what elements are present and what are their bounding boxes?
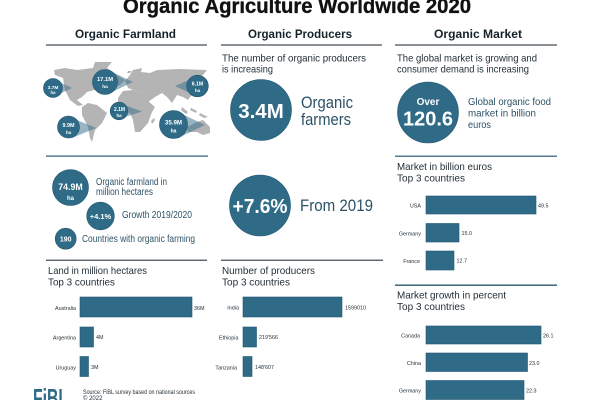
callout: 35.9M ha [160, 110, 205, 138]
stat: over 120.6: Global organic food [468, 97, 551, 108]
stat: 190 countries [55, 228, 195, 249]
panel: organic farmland [44, 29, 210, 376]
subheading: land in million hectares: Land in million hectares [48, 265, 147, 277]
callout: 35.9M ha: 35.9M [165, 120, 182, 126]
bar chart: producers: 148'607 [255, 365, 274, 371]
subheading: market in billion euros [397, 161, 492, 184]
callout: 2.1M ha: ha [116, 113, 122, 118]
bar chart: producers: Tanzania [215, 366, 237, 372]
bar chart: market: 49.5 [538, 204, 548, 210]
callout: 17.1M ha: 17.1M [97, 77, 113, 83]
bar chart: land: Australia [55, 306, 76, 312]
callout: 2.1M ha [110, 102, 142, 120]
text: producers intro [222, 52, 366, 76]
callout: 3.7M ha [44, 78, 72, 98]
bar chart: producers: Ethiopia [219, 336, 238, 342]
bar chart: land [53, 297, 205, 376]
source note [83, 390, 195, 400]
text: market intro [397, 52, 537, 76]
map: land masses [54, 62, 210, 142]
subheading: number of producers: Top 3 countries [222, 276, 290, 288]
callout: 2.1M ha: 2.1M [114, 107, 125, 113]
callout: 35.9M ha: ha [171, 128, 177, 134]
heading: organic market: Organic Market [434, 29, 522, 41]
bar chart: land: 4M [96, 335, 104, 341]
stat: 190 countries: 190 [60, 236, 72, 244]
callout: 3.7M ha: ha [51, 90, 56, 95]
bar chart: market growth: 22.3 [526, 388, 536, 394]
callout: 6.1M ha: ha [195, 88, 201, 93]
bar chart: market growth: Germany [399, 388, 421, 394]
stat: +7.6% from 2019: +7.6% [232, 196, 288, 218]
text: producers intro: is increasing [222, 64, 273, 76]
bar chart: market: Germany [399, 232, 421, 238]
subheading: market in billion euros: Market in billion euros [397, 161, 492, 173]
stat: growth 4.1%: +4.1% [90, 212, 112, 221]
bar chart: land: 36M [194, 306, 205, 312]
stat: +7.6% from 2019 [230, 175, 373, 236]
callout: 6.1M ha [175, 75, 208, 97]
bar chart: producers: 219'566 [259, 335, 278, 341]
subheading: market growth in percent [397, 290, 506, 313]
stat: over 120.6: euros [468, 120, 491, 131]
bar chart: market growth: 26.1 [543, 334, 554, 340]
subheading: number of producers [222, 265, 315, 288]
bar chart: land: Argentina [53, 336, 76, 342]
source note: Source: FiBL survey based on national sources [83, 390, 195, 396]
bar chart: market [399, 196, 548, 270]
bar chart: market growth: China [407, 361, 421, 367]
bar chart: producers: India [227, 306, 239, 312]
heading: organic producers: Organic Producers [248, 29, 352, 41]
world map [44, 62, 210, 142]
text: market intro: consumer demand is increasing [397, 64, 529, 76]
subheading: land in million hectares [48, 265, 147, 288]
callout: 17.1M ha [92, 70, 133, 94]
stat: growth 4.1% [87, 202, 192, 230]
text: producers intro: The number of organic producers [222, 52, 366, 64]
stat: over 120.6: market in billion [468, 108, 536, 120]
stat: 190 countries: Countries with organic farming [82, 234, 195, 245]
bar chart: producers: 1599010 [345, 306, 366, 312]
bar chart: market: 12.7 [456, 258, 467, 264]
stat: growth 4.1%: Growth 2019/2020 [122, 210, 192, 221]
callout: 3.7M ha: 3.7M [48, 85, 58, 91]
text: market intro: The global market is growing and [397, 52, 537, 64]
stat: 74.9M ha farmland: ha [67, 196, 75, 202]
stat: 3.4M organic farmers [230, 80, 353, 140]
stat: over 120.6: Over [417, 97, 440, 108]
stat: 74.9M ha farmland: 74.9M [58, 182, 83, 192]
bar chart: market growth: Canada [401, 334, 420, 340]
callout: 9.9M ha: 9.9M [63, 123, 75, 129]
bar chart: market: France [403, 259, 420, 265]
subheading: land in million hectares: Top 3 countries [48, 276, 115, 288]
callout: 9.9M ha: ha [66, 130, 72, 135]
stat: +7.6% from 2019: From 2019 [300, 196, 373, 215]
bar chart: producers [215, 297, 366, 376]
subheading: market growth in percent: Market growth in percent [397, 290, 506, 302]
panel: organic market [395, 29, 557, 400]
heading: organic farmland: Organic Farmland [75, 29, 176, 41]
bar chart: land: Uruguay [56, 366, 76, 372]
stat: 3.4M organic farmers: Organic [301, 93, 353, 112]
stat: over 120.6: 120.6 [403, 108, 453, 130]
stat: 3.4M organic farmers: farmers [301, 110, 351, 129]
callout: 17.1M ha: ha [102, 84, 108, 90]
stat: 3.4M organic farmers: 3.4M [238, 100, 284, 123]
panel: organic producers [215, 29, 383, 376]
stat: over 120.6 [398, 82, 551, 143]
bar chart: market: USA [410, 204, 421, 210]
bar chart: market: 15.0 [462, 231, 472, 237]
bar chart: market growth [399, 326, 554, 400]
subheading: market in billion euros: Top 3 countries [397, 172, 465, 184]
stat: 74.9M ha farmland: million hectares [96, 187, 153, 198]
callout: 6.1M ha: 6.1M [192, 82, 203, 88]
stat: 74.9M ha farmland: Organic farmland in [96, 177, 167, 188]
subheading: number of producers: Number of producers [222, 265, 315, 277]
callout: 9.9M ha [58, 116, 96, 138]
bar chart: land: 3M [91, 365, 99, 371]
bar chart: market growth: 23.0 [529, 361, 540, 367]
stat: 74.9M ha farmland [52, 170, 167, 206]
subheading: market growth in percent: Top 3 countries [397, 301, 465, 313]
